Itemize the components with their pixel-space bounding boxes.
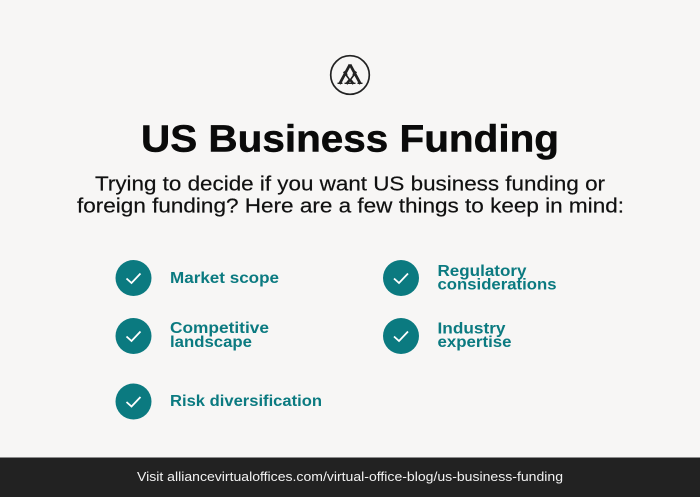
item: industry expertise: Industry [438, 320, 506, 338]
footer: Visit alliancevirtualoffices.com/virtual-office-blog/us-business-funding [137, 469, 563, 484]
item: regulatory considerations: Regulatory [438, 263, 527, 280]
item: risk diversification: Risk diversification [170, 393, 322, 410]
item: market scope: Market scope [170, 270, 279, 287]
item: market scope [116, 260, 279, 296]
subtitle [77, 174, 624, 218]
subtitle: foreign funding? Here are a few things to keep in mind: [77, 196, 624, 218]
subtitle: Trying to decide if you want US business funding or [95, 174, 605, 196]
item: industry expertise [383, 318, 512, 354]
item: regulatory considerations [383, 260, 556, 296]
logo [331, 56, 369, 94]
item: competitive landscape [116, 318, 269, 354]
title: US Business Funding [141, 118, 559, 160]
item: industry expertise: expertise [438, 334, 512, 351]
item: risk diversification [116, 384, 322, 420]
item: competitive landscape: landscape [170, 334, 252, 351]
footer [0, 458, 700, 497]
item: competitive landscape: Competitive [170, 320, 269, 337]
item: regulatory considerations: considerations [438, 276, 556, 294]
